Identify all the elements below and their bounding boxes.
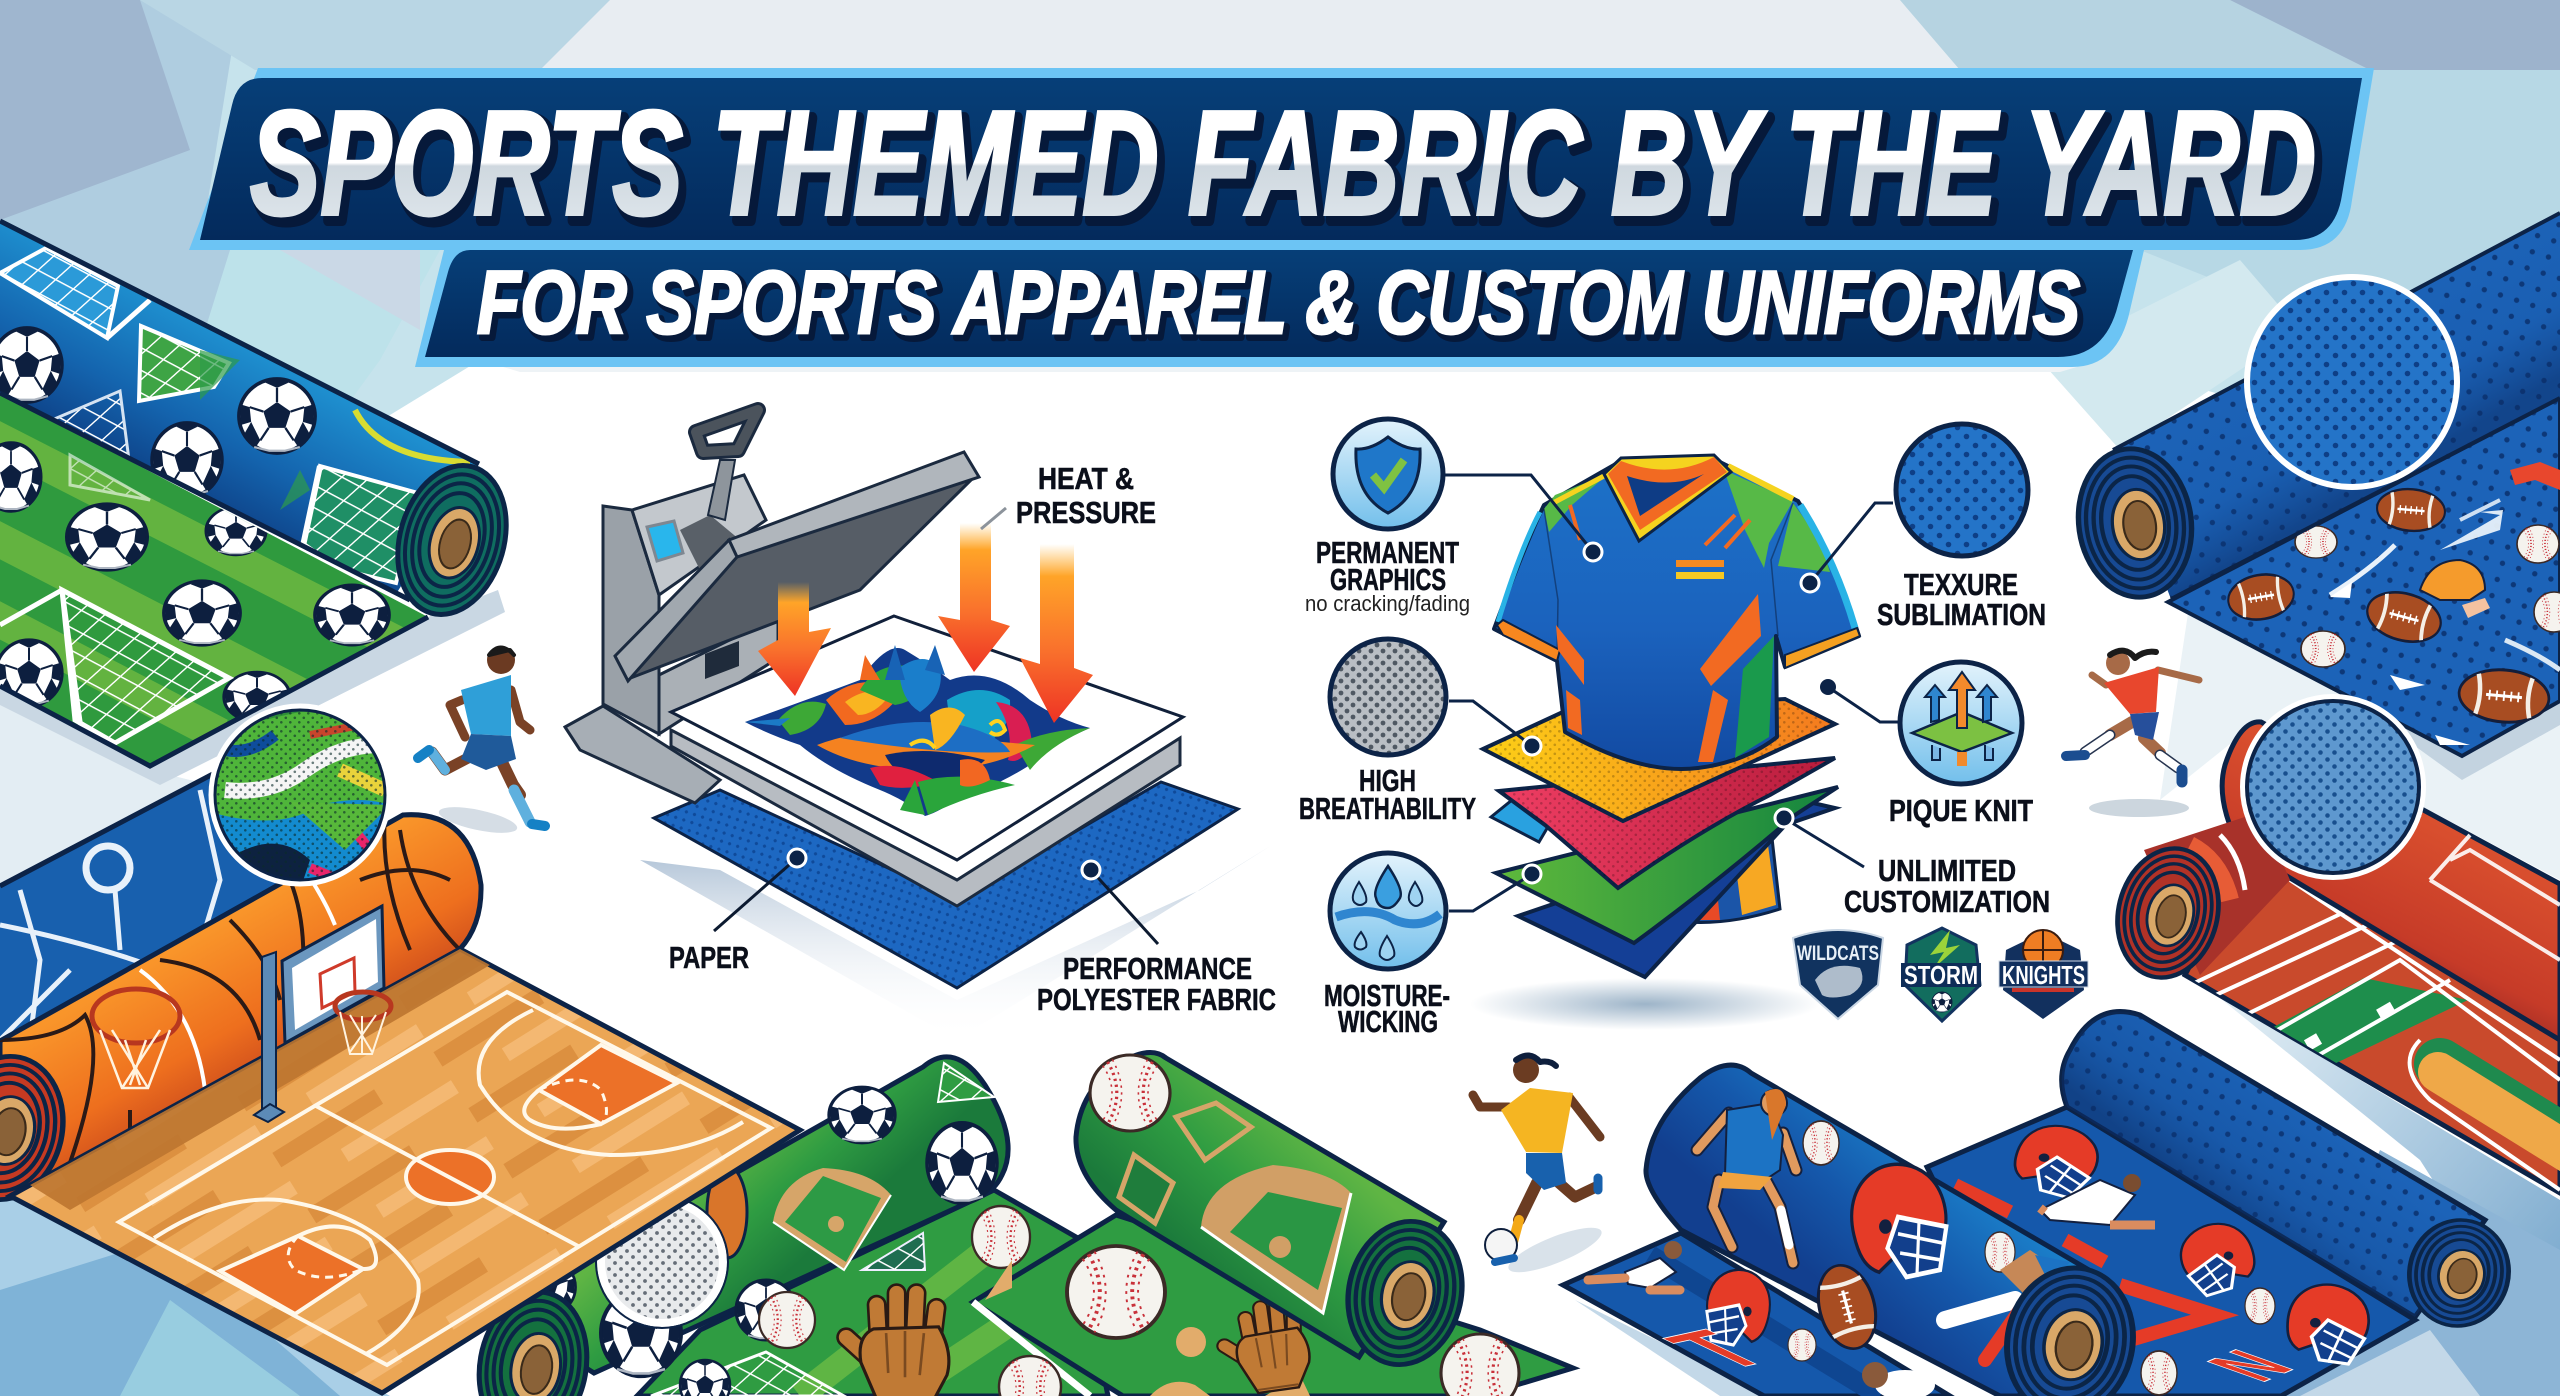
track sheet xyxy=(2185,850,2560,1193)
navy layer xyxy=(1518,800,1835,977)
zoom circle: blue mesh xyxy=(2247,277,2457,487)
label: performance polyester fabric xyxy=(1037,861,1276,1017)
feature: high breathability xyxy=(1299,639,1476,826)
zoom circle: sublimated mesh xyxy=(210,690,390,890)
green layer xyxy=(1496,787,1838,943)
subtitle banner: FOR SPORTS APPAREL & CUSTOM UNIFORMS xyxy=(477,252,2080,352)
soccer sheet xyxy=(0,396,428,763)
roll B body xyxy=(1076,1053,1444,1357)
small player xyxy=(1588,1241,1682,1290)
sheet shadow xyxy=(1575,1300,2480,1396)
orange roll peek xyxy=(707,1166,747,1258)
roll B end xyxy=(1335,1211,1475,1375)
subtitle banner: FOR SPORTS APPAREL & CUSTOM UNIFORMS xyxy=(481,256,2084,356)
jersey xyxy=(1494,455,1860,769)
soccer roll end xyxy=(381,453,523,627)
feature: texture sublimation xyxy=(1877,424,2046,632)
sheet B xyxy=(973,1215,1573,1396)
feature: permanent graphics: no cracking/fading xyxy=(1305,591,1470,616)
feature: moisture wicking: MOISTURE- xyxy=(1324,978,1450,1013)
icon: blue mesh xyxy=(1896,424,2028,556)
label: heat and pressure: PRESSURE xyxy=(1016,495,1156,530)
roll E body xyxy=(2113,213,2560,599)
orange basketball roll xyxy=(0,815,481,1198)
label: performance polyester fabric: POLYESTER FABRIC xyxy=(1037,982,1276,1017)
feature: moisture wicking: WICKING xyxy=(1338,1004,1438,1039)
stack shadow xyxy=(1470,978,1820,1030)
sliding player xyxy=(2040,1174,2155,1225)
feature: texture sublimation: SUBLIMATION xyxy=(1877,597,2046,632)
soccer roll body xyxy=(0,221,479,594)
roll C body xyxy=(1646,1065,2089,1396)
press base xyxy=(565,706,720,803)
baseball and soccer green rolls xyxy=(468,1053,1573,1396)
team badge: knights xyxy=(1999,930,2088,1019)
label: heat and pressure: HEAT & xyxy=(1038,461,1134,496)
icon: grey mesh xyxy=(1330,639,1446,755)
left sheet: T xyxy=(1641,1319,1794,1380)
basketball court sheet xyxy=(10,945,800,1393)
roll A end xyxy=(468,1283,598,1396)
press lid xyxy=(615,452,979,681)
zoom circle: white mesh xyxy=(596,1196,728,1328)
team badge: wildcats: WILDCATS xyxy=(1797,942,1879,965)
feature: permanent graphics: GRAPHICS xyxy=(1330,562,1446,597)
hoop and backboard xyxy=(254,906,391,1122)
zoom circle: pique knit xyxy=(2243,697,2423,877)
heat press diagram xyxy=(565,410,1280,1040)
jersey lower part xyxy=(1645,838,1780,922)
team badge: wildcats xyxy=(1793,930,1883,1019)
roll E end xyxy=(2069,441,2201,605)
right sheet xyxy=(1927,1107,2415,1396)
runner: yellow jersey xyxy=(1473,1055,1606,1281)
icon: shield with check xyxy=(1333,419,1443,529)
pink layer xyxy=(1499,758,1835,888)
front track roll xyxy=(2144,812,2290,975)
feature: pique knit xyxy=(1889,662,2033,828)
feature: unlimited customization xyxy=(1793,853,2088,1021)
team badge: storm xyxy=(1901,928,1981,1021)
basketball roll end xyxy=(0,1045,76,1211)
soccer fabric roll xyxy=(0,221,523,785)
team badge: knights: KNIGHTS xyxy=(2002,960,2085,990)
team badge: storm: STORM xyxy=(1904,960,1978,990)
feature: high breathability: HIGH xyxy=(1359,763,1416,798)
light blue layer xyxy=(1491,800,1549,842)
lower player on roll xyxy=(1945,1250,2070,1360)
callout lines and dots xyxy=(1444,475,1898,911)
icon: water drops xyxy=(1330,853,1446,969)
roll D body xyxy=(2062,1012,2485,1317)
label: paper xyxy=(669,849,806,975)
runner: blue jersey xyxy=(418,646,545,838)
right sheet: N xyxy=(2188,1342,2314,1389)
player on roll xyxy=(1697,1089,1796,1263)
footballs, baseballs and helmet on sheet xyxy=(2225,462,2560,745)
track roll end xyxy=(2104,838,2232,988)
blue court roll behind xyxy=(0,772,276,1038)
football fabric rolls xyxy=(1563,1012,2520,1396)
runner: red jersey xyxy=(2066,651,2199,817)
label: performance polyester fabric: PERFORMANCE xyxy=(1063,951,1252,986)
hoop on roll xyxy=(92,989,180,1088)
roll C end xyxy=(1993,1256,2147,1396)
transfer paper xyxy=(671,616,1183,860)
feature: unlimited customization: CUSTOMIZATION xyxy=(1844,884,2050,919)
polyester fabric sheet xyxy=(654,782,1238,988)
upper-right mesh football roll xyxy=(2069,213,2560,780)
left sheet xyxy=(1563,1233,1950,1396)
feature: permanent graphics: PERMANENT xyxy=(1316,535,1459,570)
feature: texture sublimation: TEXXURE xyxy=(1904,567,2018,602)
jersey stack diagram xyxy=(1444,455,1898,1030)
label: paper: PAPER xyxy=(669,940,749,975)
feature: unlimited customization: UNLIMITED xyxy=(1878,853,2016,888)
sublimation artwork swirl xyxy=(745,645,1090,816)
press column xyxy=(603,475,778,734)
fabric shadow xyxy=(640,840,1280,1040)
sheet shadow xyxy=(0,590,505,785)
feature: high breathability: BREATHABILITY xyxy=(1299,791,1476,826)
yellow layer xyxy=(1483,699,1835,821)
roll A body xyxy=(494,1057,1008,1376)
basketball fabric roll and court xyxy=(0,765,800,1393)
heat arrows xyxy=(758,523,1093,723)
roll D end xyxy=(2398,1209,2520,1337)
feature: moisture wicking xyxy=(1324,853,1450,1039)
track and field fabric rolls xyxy=(2104,722,2560,1193)
press handle xyxy=(696,410,758,520)
back track roll xyxy=(2222,722,2560,1040)
feature: pique knit: PIQUE KNIT xyxy=(1889,793,2033,828)
label: heat and pressure xyxy=(981,461,1156,530)
feature: permanent graphics xyxy=(1305,419,1470,616)
sheet A xyxy=(637,1190,1108,1396)
lower platen xyxy=(671,730,1180,906)
icon: moisture arrows xyxy=(1900,662,2022,784)
